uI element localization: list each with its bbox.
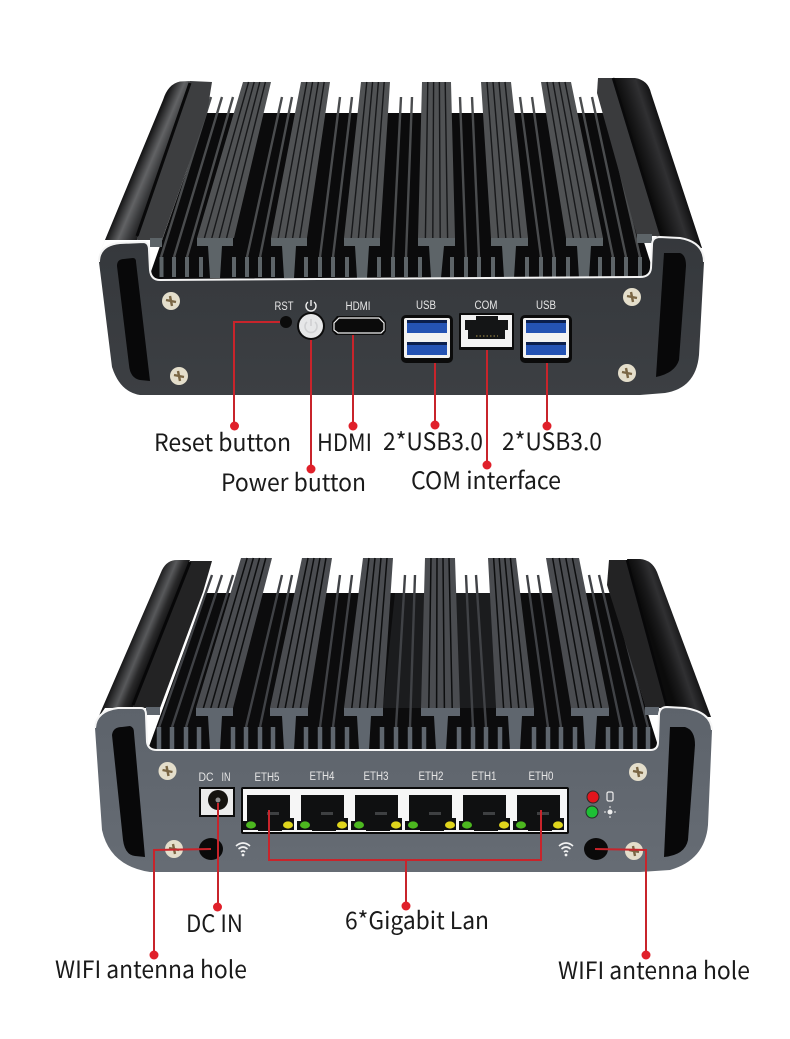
port labels: IN (222, 772, 230, 784)
heat sink block (147, 593, 660, 752)
USB port left (401, 315, 453, 363)
right vent (664, 727, 695, 857)
HDMI port (332, 316, 386, 335)
icon: power symbol (306, 300, 316, 311)
right end cap (597, 78, 702, 248)
callout: DC IN (186, 803, 243, 939)
front fin slats (159, 727, 648, 750)
callout: 6 Gigabit Lan: 6*Gigabit Lan (345, 901, 489, 936)
callout: 6 Gigabit Lan (269, 810, 541, 936)
left end cap (98, 560, 212, 718)
white bevel edge (95, 707, 712, 750)
thin fins (161, 97, 640, 257)
front face plate (99, 237, 704, 395)
left vent (117, 258, 150, 381)
callout: USB left (383, 363, 483, 457)
callout: USB right: 2*USB3.0 (502, 422, 602, 457)
callout: WIFI antenna hole right: WIFI antenna hole (558, 951, 750, 986)
callout: COM interface: COM interface (411, 461, 561, 496)
right end cap (607, 559, 711, 717)
ethernet port block (241, 787, 569, 834)
right vent (656, 253, 686, 377)
port labels: HDMI (346, 301, 370, 313)
T profiles (150, 234, 652, 278)
front fin slats (162, 257, 640, 277)
callout: DC IN: DC IN (186, 904, 243, 939)
panel: rear view device (95, 558, 712, 872)
callout: HDMI: HDMI (317, 423, 372, 458)
port labels: USB (536, 300, 556, 312)
port labels: USB (416, 300, 436, 312)
icon: wifi (236, 843, 573, 856)
DC IN jack (199, 787, 235, 817)
callout: WIFI antenna hole left: WIFI antenna hole (55, 950, 247, 985)
fin ridges (197, 82, 603, 238)
callout: WIFI antenna hole right (558, 849, 750, 986)
port labels (198, 771, 554, 784)
heat sink block (148, 113, 656, 280)
USB port right (520, 315, 572, 363)
callout: HDMI (317, 335, 372, 458)
screws (158, 762, 647, 860)
panel: front view device (99, 78, 704, 395)
port labels: COM (474, 300, 498, 312)
callout: COM interface (411, 350, 561, 496)
antenna holes (199, 838, 608, 860)
callout: Power button (221, 340, 366, 498)
reset hole (280, 316, 292, 328)
left vent (112, 726, 145, 857)
port labels: ETH4 (310, 771, 335, 783)
power button (297, 312, 325, 340)
port labels: ETH3 (364, 771, 388, 783)
COM port (459, 313, 514, 350)
fin ridges (196, 558, 609, 708)
port labels: ETH5 (254, 772, 280, 784)
callout: USB right (502, 363, 602, 457)
port labels: ETH2 (418, 771, 444, 783)
thin fins (159, 575, 648, 727)
white bevel edge (99, 237, 704, 280)
port labels: RST (274, 301, 294, 313)
left end cap (100, 81, 212, 252)
callout: Reset button: Reset button (154, 423, 291, 458)
status LEDs (586, 791, 616, 818)
port labels: ETH1 (472, 771, 496, 783)
callout: WIFI antenna hole left (55, 849, 247, 985)
T profiles (146, 707, 659, 750)
screws (162, 288, 641, 385)
mid block shading (383, 593, 496, 708)
front face plate (95, 707, 712, 872)
callout: Power button: Power button (221, 463, 366, 498)
port labels (274, 300, 556, 313)
callout: Reset button (154, 322, 291, 458)
port labels: ETH0 (528, 771, 554, 783)
callout: USB left: 2*USB3.0 (383, 422, 483, 457)
port labels: DC (198, 772, 214, 784)
